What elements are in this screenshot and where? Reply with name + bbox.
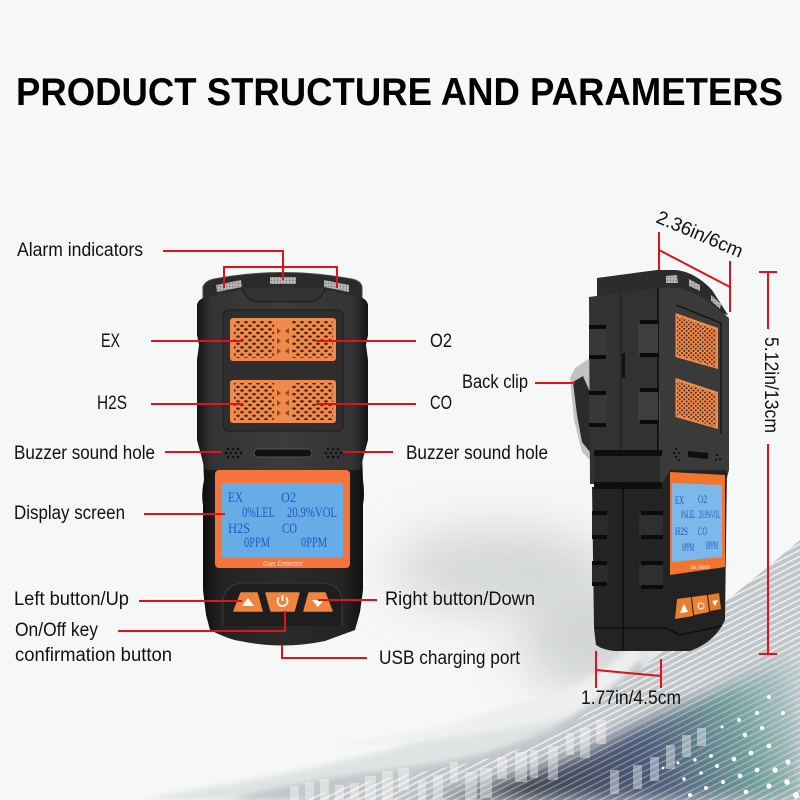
side display screen: Gas Detector: [690, 565, 710, 571]
side display screen: CO: [698, 524, 707, 538]
top cap: [597, 270, 728, 315]
display screen: EX: [228, 490, 243, 506]
label: H2S: H2S: [97, 393, 127, 414]
side display screen: O2: [698, 492, 707, 506]
side sensor recess line: [676, 305, 721, 434]
left button up: [234, 593, 262, 611]
label: CO: CO: [430, 393, 452, 414]
dimension: height: 5.12in/13cm: [760, 337, 781, 433]
upper rear face: [589, 288, 660, 484]
display screen: 0PPM: [301, 535, 327, 551]
side buzzer holes and slot: [673, 448, 721, 461]
label: on/off key: On/Off key: [15, 620, 98, 641]
lower body side: [592, 470, 727, 651]
label: USB charging port: USB charging port: [379, 648, 521, 669]
label: back clip: Back clip: [462, 372, 528, 393]
dimension lines: [596, 232, 777, 688]
top vents: [666, 275, 721, 309]
side view of gas detector: 20.9%VOL: [699, 507, 720, 521]
label: left button up: Left button/Up: [14, 589, 129, 610]
side sensor window bottom: [676, 378, 718, 429]
display screen: H2S: [228, 521, 250, 537]
label: O2: O2: [430, 331, 452, 352]
EX and O2 sensor window: [230, 318, 336, 361]
side display screen: H2S: [675, 524, 688, 538]
buzzer holes and slot: [225, 448, 342, 458]
display screen: 0%LEL: [242, 505, 275, 521]
data columns decoration: [290, 720, 706, 800]
label: alarm indicators: Alarm indicators: [17, 240, 143, 261]
display screen: CO: [282, 521, 297, 537]
side sensor window top: [676, 313, 718, 369]
button bay: [223, 583, 342, 626]
label: confirmation button: confirmation button: [15, 645, 172, 666]
side display screen: [670, 472, 725, 575]
display screen: 20.9%VOL: [287, 505, 337, 521]
dimension: depth: 1.77in/4.5cm: [581, 688, 681, 709]
side buttons: [675, 593, 721, 619]
label: right button down: Right button/Down: [385, 589, 535, 610]
H2S and CO sensor window: [230, 380, 336, 423]
display screen: 0PPM: [244, 535, 270, 551]
label: buzzer sound hole left: Buzzer sound hole: [14, 443, 155, 464]
upper front face: [658, 288, 729, 485]
dimension: width: 2.36in/6cm: [653, 207, 746, 263]
label: EX: EX: [101, 331, 120, 352]
back clip: [570, 358, 592, 462]
lower body: [202, 455, 364, 646]
label: buzzer sound hole right: Buzzer sound hole: [406, 443, 548, 464]
side display screen: EX: [675, 493, 684, 507]
sensor recess: [223, 310, 343, 431]
power button: [266, 593, 299, 611]
label: display screen: Display screen: [14, 503, 125, 524]
side display screen: 0PPM: [706, 538, 718, 552]
side display screen: 0PPM: [682, 540, 694, 554]
display screen: [215, 470, 350, 568]
grip bumps: [589, 322, 663, 587]
display screen: Gas Detector: [263, 561, 304, 568]
top cap with alarm indicators: [203, 272, 362, 300]
front view of gas detector: [197, 272, 368, 646]
callout leader lines: [118, 251, 575, 658]
display screen: O2: [281, 490, 296, 506]
side display screen: 0%LEL: [681, 507, 695, 521]
upper body: [197, 288, 368, 470]
right button down: [304, 593, 332, 611]
background: [156, 511, 800, 800]
side view of gas detector: [570, 270, 729, 651]
